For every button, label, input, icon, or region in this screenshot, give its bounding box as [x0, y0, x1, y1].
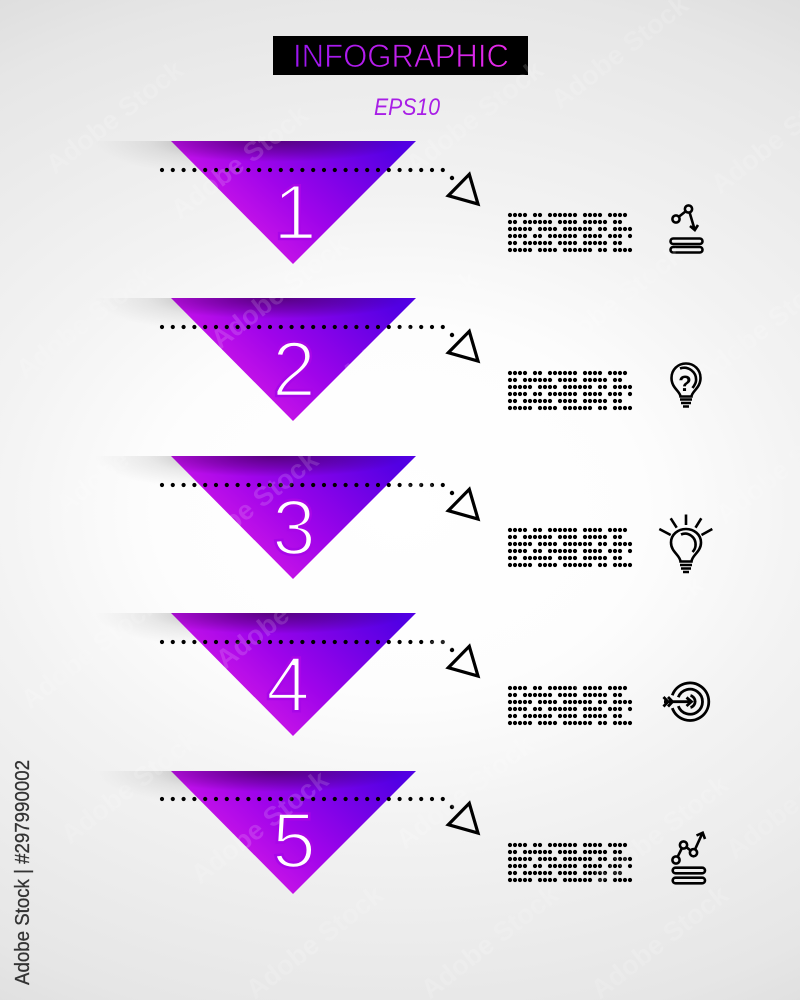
watermarks: Adobe Stock — [210, 549, 360, 675]
watermarks: Adobe Stock — [560, 569, 710, 695]
icon: shining light bulb — [659, 514, 712, 572]
watermarks: Adobe Stock — [40, 54, 190, 180]
watermarks: Adobe Stock — [345, 599, 495, 725]
icon: light bulb with question mark — [672, 364, 700, 406]
watermarks: Adobe Stock — [165, 99, 315, 225]
panel: step 5: 5 — [272, 796, 316, 884]
panel: step 3 — [95, 456, 712, 579]
icon: light bulb with question mark: ? — [678, 371, 692, 396]
icon: graph with arrow and bars — [670, 205, 702, 252]
watermarks: Adobe Stock — [400, 54, 550, 180]
watermarks: Adobe Stock — [185, 764, 335, 890]
watermarks: Adobe Stock — [390, 729, 540, 855]
panel: step 2: 2 — [272, 325, 316, 413]
panel: step 4: 4 — [266, 640, 310, 728]
watermarks: Adobe Stock — [515, 399, 665, 525]
panel: step 1: 1 — [273, 168, 317, 256]
subtitle: EPS10 — [374, 94, 441, 121]
watermarks: Adobe Stock — [205, 229, 355, 355]
watermarks: Adobe Stock — [175, 444, 325, 570]
watermarks: Adobe Stock — [335, 264, 485, 390]
watermarks: Adobe Stock — [55, 724, 205, 850]
panel: step 1 — [95, 141, 702, 264]
panel: step 2 — [95, 298, 700, 421]
watermarks: Adobe Stock — [540, 239, 690, 365]
panel: step 4 — [95, 613, 709, 736]
watermarks: Adobe Stock — [380, 399, 530, 525]
panel: step 3: 3 — [272, 483, 316, 571]
watermarks: Adobe Stock — [50, 394, 200, 520]
watermarks: Adobe Stock — [15, 589, 165, 715]
watermarks: Adobe Stock — [585, 769, 735, 895]
title banner: INFOGRAPHIC — [293, 38, 509, 74]
vertical stock credit: Adobe Stock | #297990002 — [12, 760, 34, 985]
icon: target with arrow — [664, 683, 709, 721]
watermarks: Adobe Stock — [10, 259, 160, 385]
panel: step 5 — [95, 771, 705, 894]
icon: rising chart with bars — [672, 833, 705, 883]
